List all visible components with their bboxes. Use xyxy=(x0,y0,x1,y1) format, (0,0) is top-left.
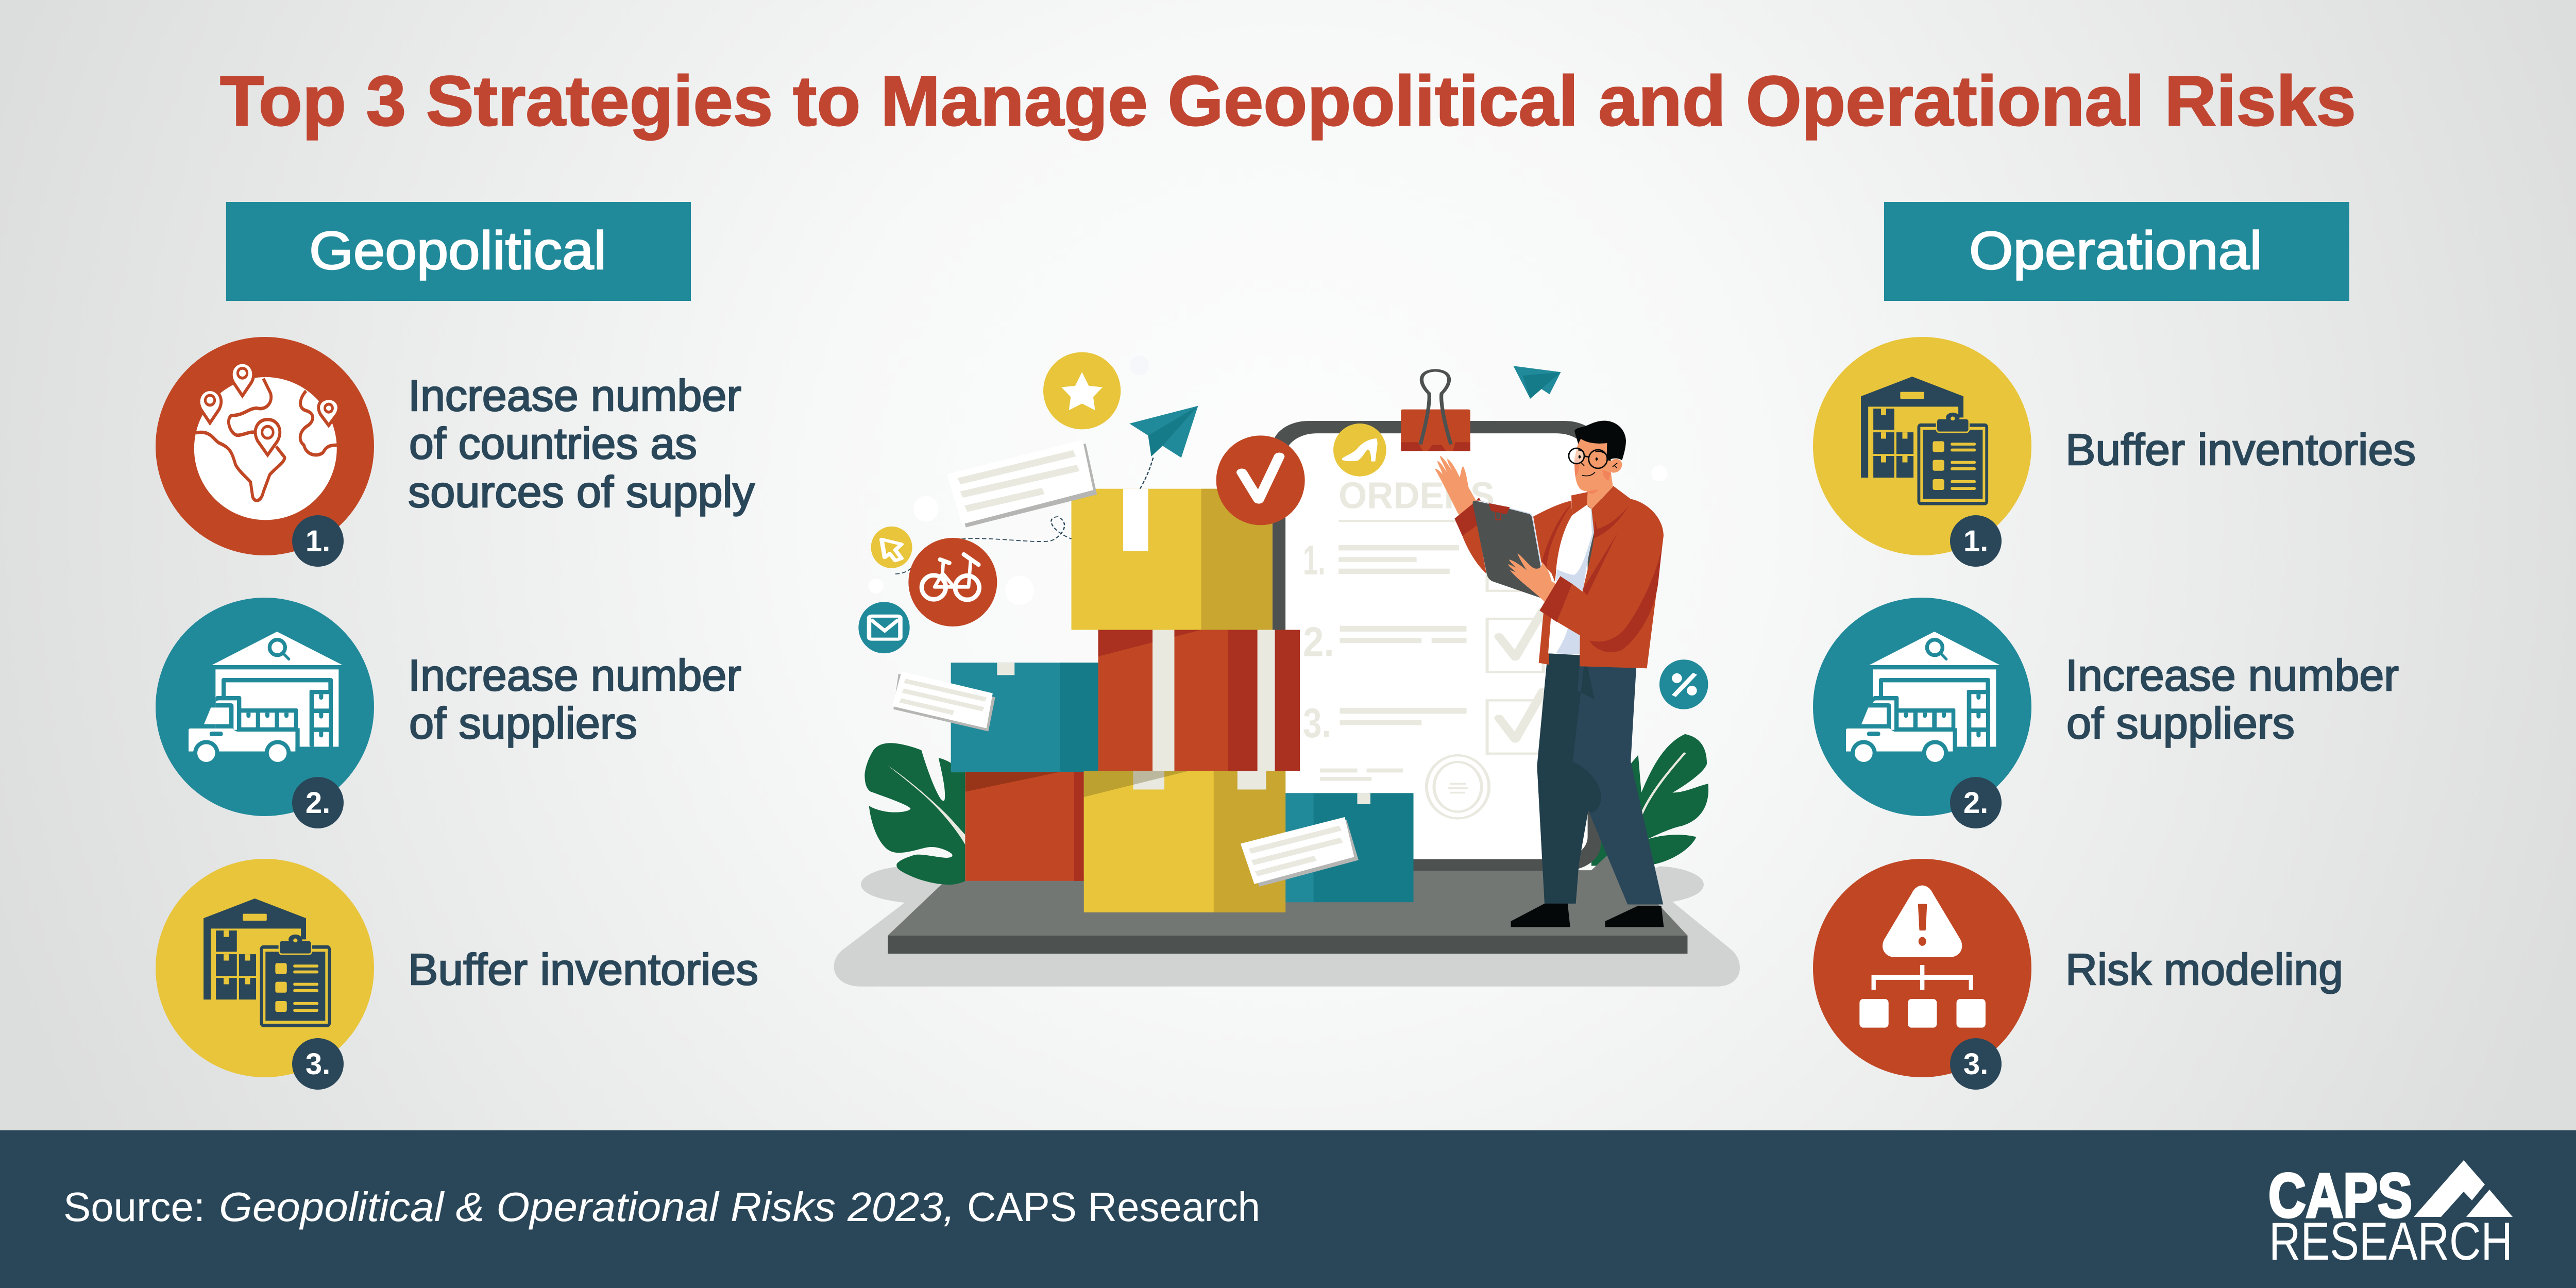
icon: check badge xyxy=(1216,435,1305,525)
hair xyxy=(1574,421,1626,461)
heading: Operational: Operational xyxy=(1969,221,2262,281)
box: lower yellow xyxy=(1084,771,1285,912)
heading: Geopolitical: Geopolitical xyxy=(309,221,606,281)
icon: warehouse and checklist, strategy 3 xyxy=(156,859,374,1077)
binder clip xyxy=(1401,370,1470,451)
text: operational 1: Buffer inventories xyxy=(2065,426,2416,474)
logo: CAPS Research xyxy=(2268,1160,2513,1272)
glasses xyxy=(1568,448,1611,468)
heading: Operational xyxy=(1884,202,2349,301)
box: middle red xyxy=(1098,630,1300,771)
decorative dots xyxy=(869,355,1668,605)
leaf left xyxy=(865,743,965,885)
jacket back panel xyxy=(1533,501,1572,665)
card: left xyxy=(892,671,995,732)
leaf right xyxy=(1591,734,1708,866)
card: bottom xyxy=(1241,817,1359,887)
text: strategy 2: of suppliers xyxy=(409,699,637,748)
icon: shoe badge xyxy=(1333,423,1386,477)
stamp and signature xyxy=(1320,755,1489,818)
badge 2 xyxy=(1950,777,2002,828)
badge 1: 1. xyxy=(306,524,330,558)
dashed flight paths xyxy=(895,457,1153,574)
board heading: ORDERS xyxy=(1338,474,1495,516)
raised sleeve xyxy=(1454,503,1486,573)
source text: Source: xyxy=(63,1184,205,1230)
box: lower red xyxy=(965,772,1084,881)
panel: operational column xyxy=(1813,202,2416,1090)
order board xyxy=(1273,421,1601,871)
list item 3: 3. xyxy=(1303,700,1331,746)
list item 3 xyxy=(1303,700,1467,746)
card: top xyxy=(947,440,1097,528)
platform xyxy=(888,853,1687,954)
central illustration: boxes, order board and man xyxy=(834,352,1740,987)
list item 1: 1. xyxy=(1303,537,1326,583)
logo: CAPS Research: RESEARCH xyxy=(2269,1212,2513,1272)
icon: star badge xyxy=(1043,352,1121,429)
badge 2 xyxy=(292,777,344,828)
list item 2: 2. xyxy=(1303,618,1334,665)
badge 3 xyxy=(292,1038,344,1090)
source text: Geopolitical & Operational Risks 2023, xyxy=(219,1184,955,1230)
icon: warehouse and checklist, operational 1 xyxy=(1813,337,2031,555)
text: operational 2: of suppliers xyxy=(2066,699,2295,748)
hand on tablet xyxy=(1508,553,1556,603)
text: strategy 2 xyxy=(408,651,741,748)
text: operational 2: Increase number xyxy=(2065,651,2399,700)
list item 2 xyxy=(1303,618,1467,665)
icon: warehouse and truck, operational 2 xyxy=(1813,598,2031,816)
panel: geopolitical column xyxy=(156,202,758,1090)
man: trousers and shoes xyxy=(1511,653,1664,927)
text: strategy 1: Increase number xyxy=(408,371,741,420)
icon: globe with location pins, strategy 1 xyxy=(156,337,374,555)
heading: Geopolitical xyxy=(226,202,691,301)
list item 1 xyxy=(1303,537,1459,583)
badge 3 xyxy=(1950,1038,2002,1090)
icon: mail badge xyxy=(858,602,910,653)
neck and face xyxy=(1574,439,1622,509)
badge 2: 2. xyxy=(1963,786,1988,820)
text: strategy 2: Increase number xyxy=(408,651,741,700)
title: Top 3 Strategies to Manage Geopolitical and Operational Risks xyxy=(220,62,2356,141)
jacket front xyxy=(1539,486,1664,668)
badge 2: 2. xyxy=(306,786,330,820)
collar xyxy=(1571,492,1588,515)
icon: risk warning and hierarchy, operational 3 xyxy=(1813,859,2031,1077)
badge 3: 3. xyxy=(306,1047,330,1081)
text: strategy 3: Buffer inventories xyxy=(408,945,758,994)
raised hand xyxy=(1435,456,1476,515)
badge 3: 3. xyxy=(1963,1047,1988,1081)
text: operational 3: Risk modeling xyxy=(2065,945,2343,994)
text: strategy 1: of countries as xyxy=(409,419,697,468)
icon: warehouse and truck, strategy 2 xyxy=(156,598,374,816)
footer bar xyxy=(0,1130,2576,1288)
source text xyxy=(63,1184,1260,1230)
icon: bicycle badge xyxy=(908,538,997,626)
badge 1 xyxy=(292,515,344,567)
icon: cursor badge xyxy=(871,527,912,568)
box: left teal xyxy=(951,663,1098,772)
text: strategy 1 xyxy=(408,371,755,517)
text: operational 2 xyxy=(2065,651,2399,748)
tablet xyxy=(1472,498,1545,599)
box: top yellow xyxy=(1072,489,1273,630)
text: strategy 1: sources of supply xyxy=(408,468,755,517)
box: lower teal xyxy=(1285,793,1414,902)
logo: CAPS Research: CAPS xyxy=(2268,1160,2412,1230)
badge 1: 1. xyxy=(1963,524,1988,558)
checkboxes xyxy=(1487,535,1544,754)
ground shadow xyxy=(834,866,1740,987)
source text: CAPS Research xyxy=(967,1184,1260,1230)
icon: percent badge xyxy=(1659,659,1708,709)
shirt xyxy=(1548,506,1594,654)
icon: paper plane small xyxy=(1513,366,1561,399)
man: upper body xyxy=(1435,421,1664,668)
icon: paper plane large xyxy=(1129,406,1198,457)
badge 1 xyxy=(1950,515,2002,567)
